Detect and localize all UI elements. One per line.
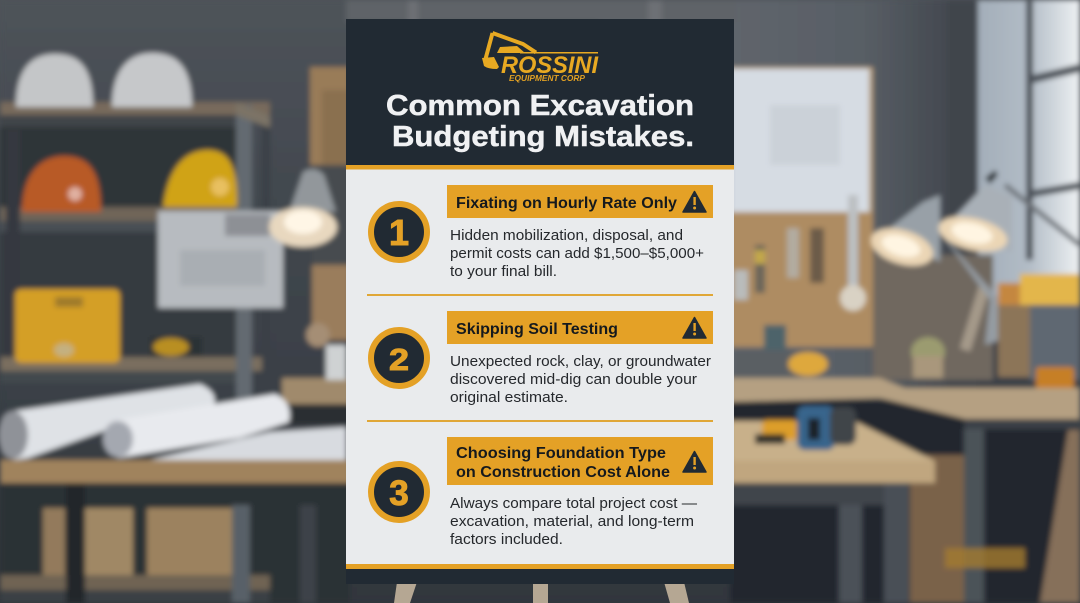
background: front wooden table and tools [730,406,935,603]
background: wood board behind poster [310,67,350,340]
item 2 [371,311,713,406]
divider [367,420,713,422]
background: whiteboard [730,67,873,212]
background: easel top posts [408,0,662,25]
number badge 2 [371,330,427,386]
body text 2 [450,354,711,406]
icon: warning triangle 2 [683,318,706,338]
background: drill and plant on back desk [734,325,945,378]
body text 1: to your final bill. [450,264,557,280]
background: right desks [730,378,1080,603]
title [386,90,694,153]
body text 3: excavation, material, and long-term [450,514,694,530]
number badge 2: 2 [389,342,409,377]
heading banner 2 [447,311,713,344]
heading banner 3: Choosing Foundation Type [456,445,666,462]
number badge 1: 1 [389,212,409,253]
background: pegboard with tools [730,195,873,347]
body text 2: discovered mid-dig can double your [450,372,697,388]
body text 2: original estimate. [450,390,568,406]
logo wordmark: ROSSINI [501,52,599,79]
body text 2: Unexpected rock, clay, or groundwater [450,354,711,370]
background: hard hats [16,53,237,212]
background: desk lamps [866,170,1080,380]
gold stripe at foot [346,564,734,569]
background: left desk lamp [269,169,337,247]
number badge 3 [371,464,427,520]
logo: Rossini Equipment Corp [482,33,599,83]
body text 3: Always compare total project cost — [450,496,698,512]
background: blueprints [0,384,290,460]
body text 1: Hidden mobilization, disposal, and [450,228,683,244]
icon: warning triangle 3 [683,452,706,472]
title: Common Excavation [386,90,694,122]
number badge 3: 3 [389,474,409,513]
body text 3 [450,496,698,548]
poster header panel [346,19,734,165]
icon: warning triangle 1 [683,192,706,212]
body text 1: permit costs can add $1,500–$5,000+ [450,246,704,262]
title: Budgeting Mistakes. [392,121,694,153]
heading banner 2: Skipping Soil Testing [456,321,618,338]
heading banner 3: on Construction Cost Alone [456,464,670,481]
background: notice board on shelf [158,211,283,308]
heading banner 3 [447,437,713,485]
divider [367,294,713,296]
poster body panel [346,170,734,564]
poster footer band [346,569,734,584]
item 3 [371,437,713,548]
background: window [978,0,1080,330]
logo tagline: EQUIPMENT CORP [509,74,586,83]
background: boxes on right desk [998,274,1080,395]
background: paper on the table [150,427,346,460]
background: back desk left [282,323,350,424]
easel legs [394,582,689,603]
number badge 1 [371,204,427,260]
background: yellow toolbox [15,289,202,363]
item 1 [371,185,713,280]
background: lower left table and boxes [0,460,350,603]
background: left shelves [0,102,270,405]
icon: excavator arm [482,33,598,69]
gold stripe under header [346,165,734,170]
body text 1 [450,228,704,280]
heading banner 1 [447,185,713,218]
body text 3: factors included. [450,532,563,548]
heading banner 1: Fixating on Hourly Rate Only [456,195,677,212]
poster [346,19,734,584]
